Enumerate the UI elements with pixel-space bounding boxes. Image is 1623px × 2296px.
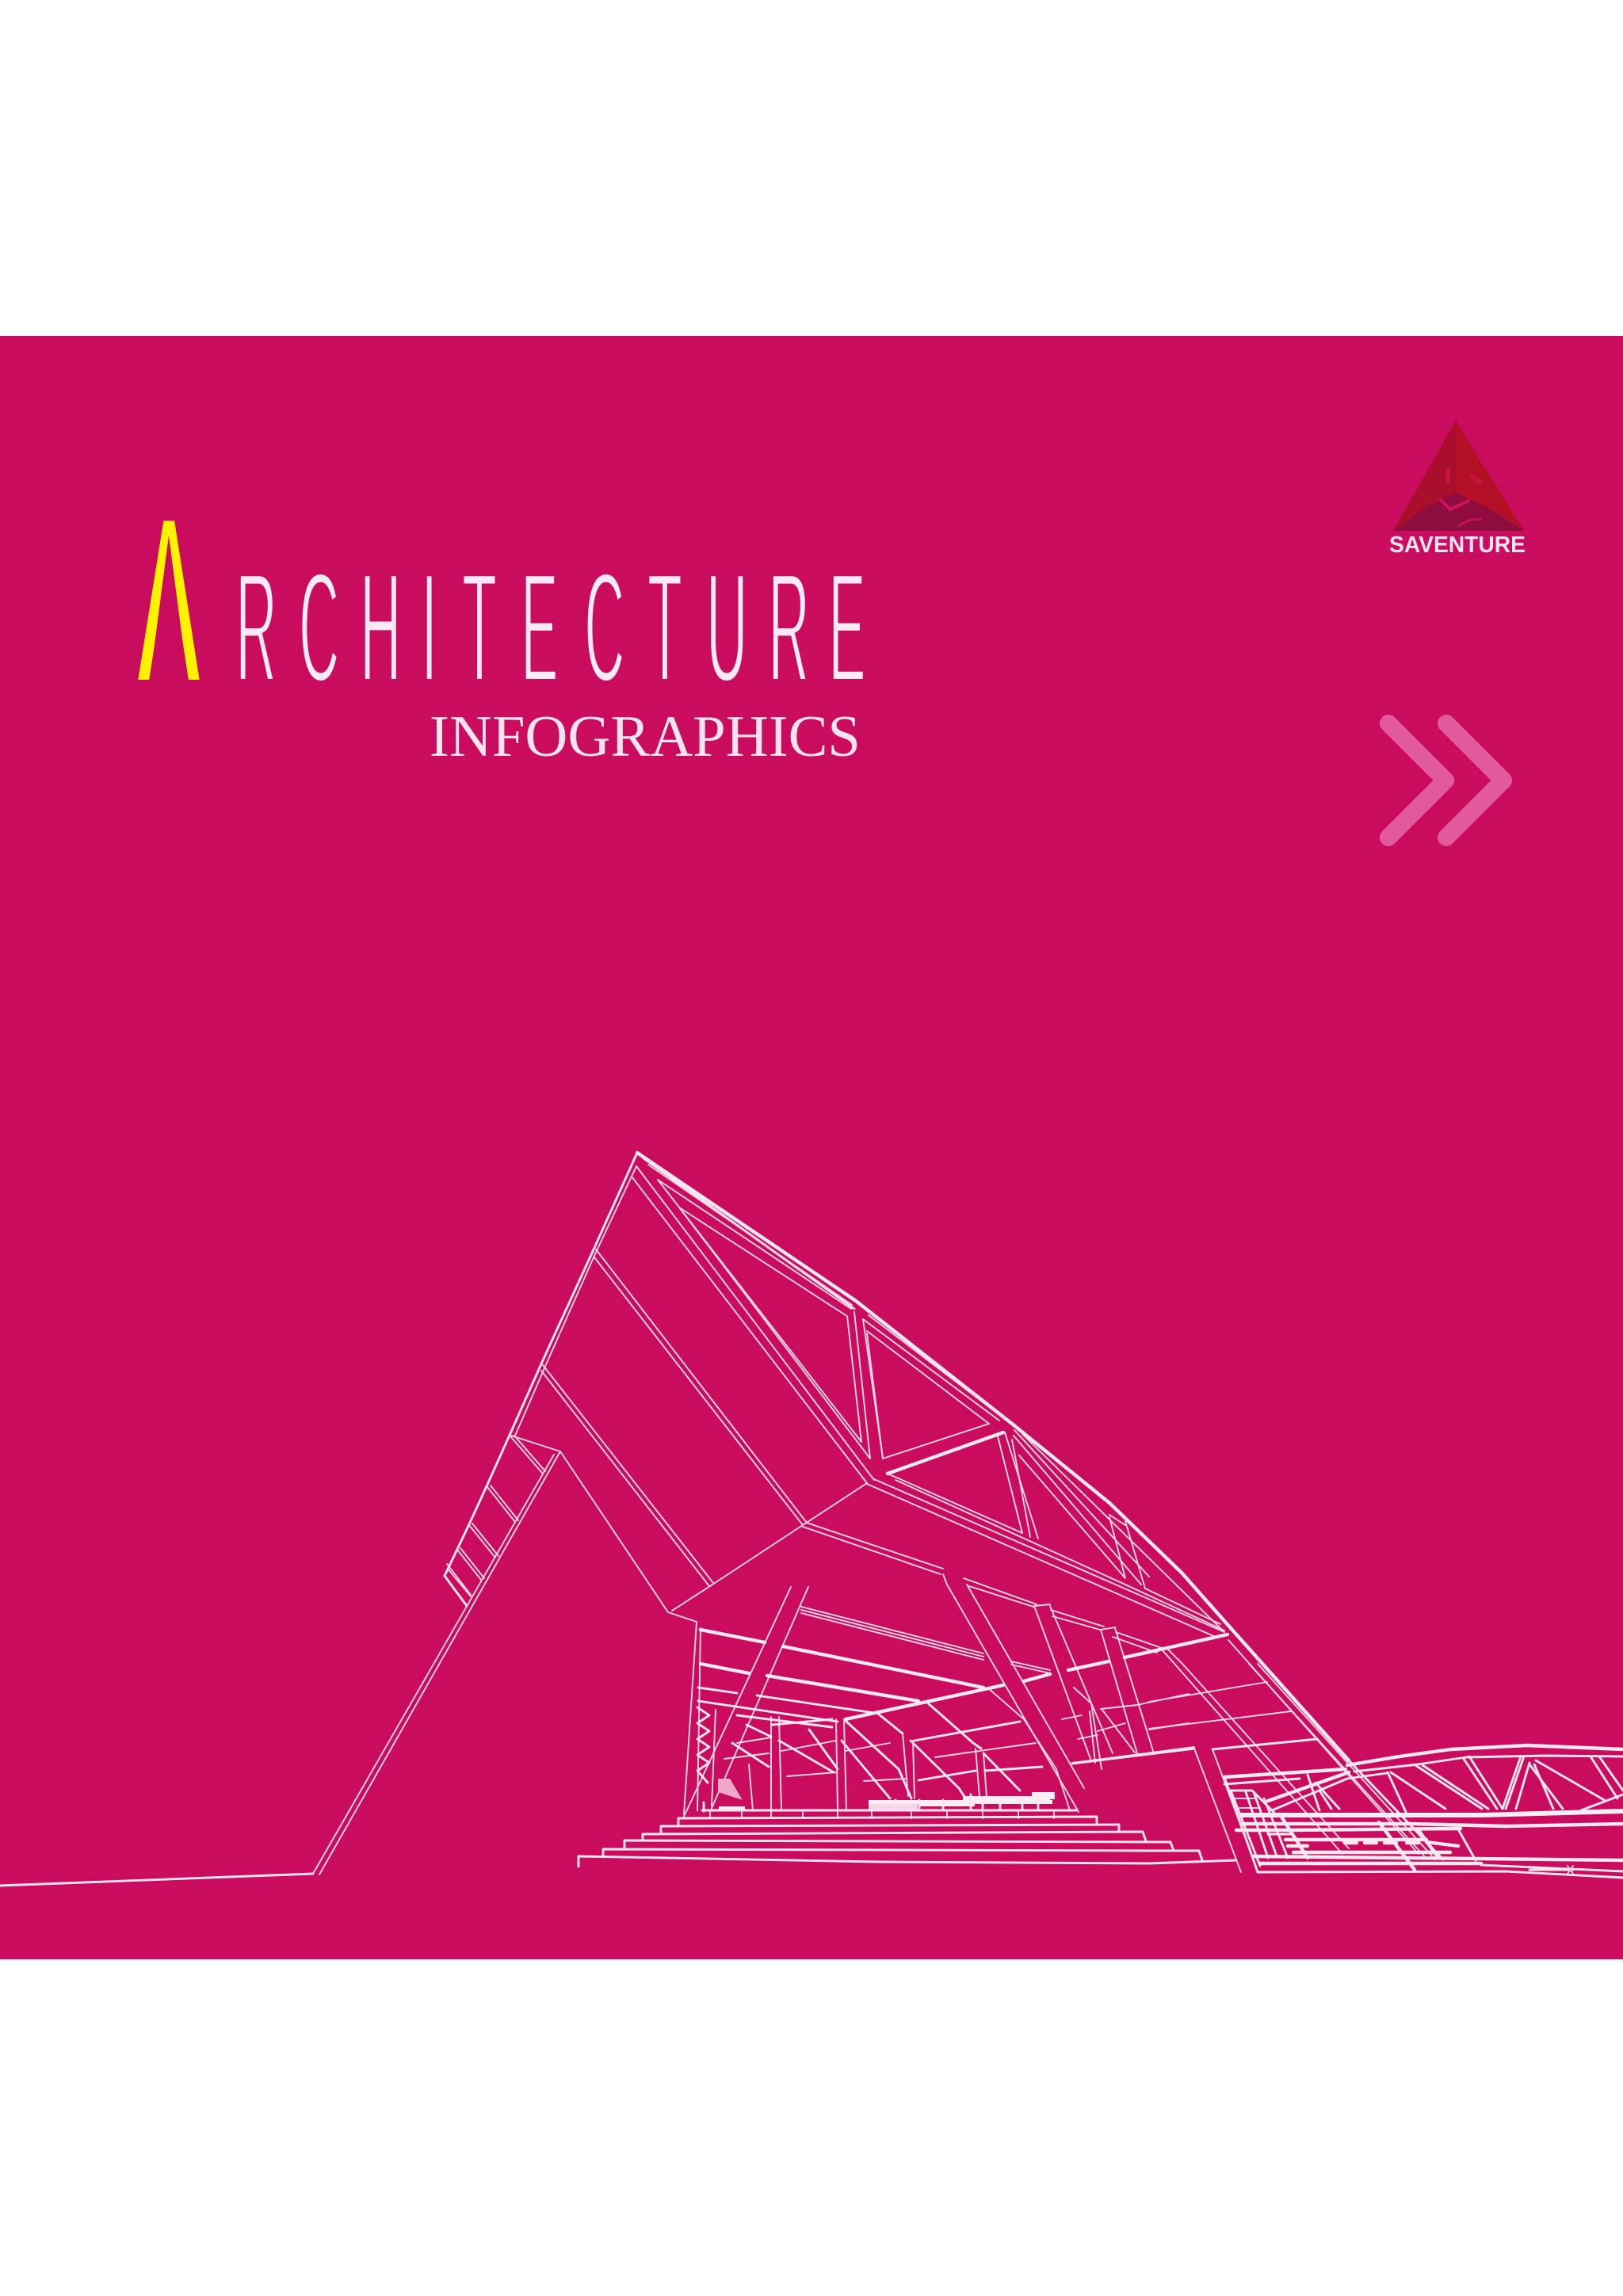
ceiling beams [698,1607,1228,1727]
dense lower structure under bridge [1224,1769,1623,1878]
zigzag truss and screen at left of entrance [697,1707,745,1811]
benches [869,1792,1055,1810]
panel folds on roof soffit [541,1166,1224,1653]
roof outline and apex [445,1153,1349,1760]
arched ribs and back wall [724,1688,1194,1810]
title: ARCHITECTURE [139,476,867,725]
logo wordmark: SAVENTURE [1389,532,1526,558]
main columns [684,1574,1153,1817]
logo triangle [1393,421,1524,531]
left wing slope and ground line [0,1451,697,1886]
title initial: yellow A: A [139,476,198,725]
logo: Saventure [1389,421,1526,558]
entrance stairs [579,1810,1235,1867]
arched truss bridge [1239,1745,1623,1826]
title letters: RCHITECTURE [235,536,867,720]
illustration: architectural line drawing of building [0,1153,1623,1886]
subtitle: INFOGRAPHICS: INFOGRAPHICS [430,704,861,769]
right roof edge lines and diagonals [1072,1640,1443,1872]
panel: magenta cover band [0,336,1623,1959]
ladder window strip [445,1436,560,1606]
icon: double chevron arrow [1388,723,1503,837]
